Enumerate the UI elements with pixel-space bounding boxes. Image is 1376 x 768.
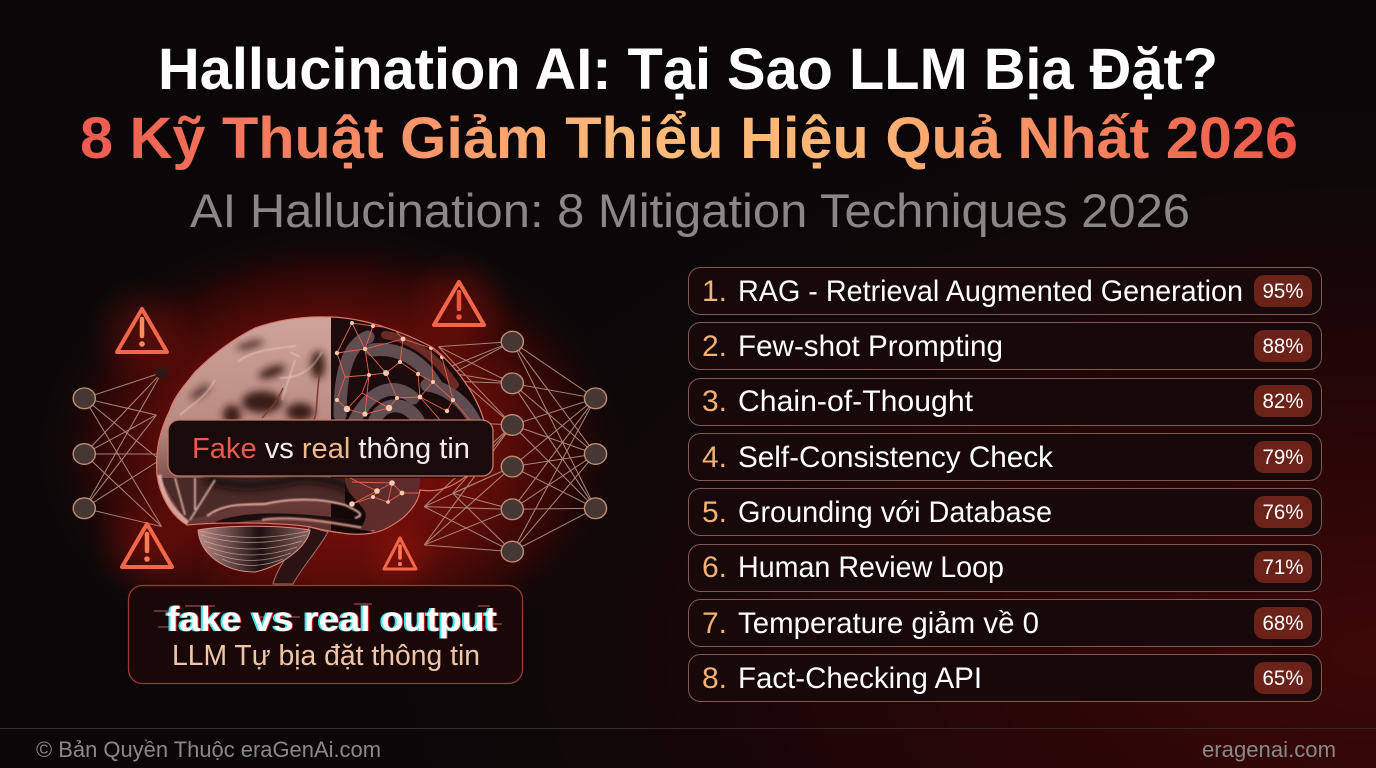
item 5: 5. [702, 496, 727, 529]
callout: fake vs real output: LLM Tự bịa đặt thông tin [172, 640, 480, 672]
item 7: 68% [1262, 612, 1304, 635]
callout: fake vs real output: fake vs real output [167, 600, 497, 639]
item 2: 88% [1262, 335, 1304, 358]
left hemisphere [157, 317, 420, 534]
item 4: Self-Consistency Check [738, 441, 1054, 474]
right hemisphere network [331, 321, 483, 507]
title [80, 37, 1298, 171]
brain hemispheres [157, 317, 483, 534]
neural network right [417, 331, 607, 562]
warning icon top right [404, 250, 514, 360]
warning icon bottom right [360, 515, 440, 595]
item 8: 65% [1262, 667, 1304, 690]
item 6: 71% [1262, 556, 1304, 579]
illustration: brain and network [64, 247, 608, 594]
item 3: Chain-of-Thought [738, 385, 974, 418]
label: fake vs real [168, 420, 493, 476]
item 6: 6. [702, 551, 727, 584]
neural network left [73, 367, 168, 527]
item 5 [688, 488, 1322, 536]
item 2 [688, 322, 1322, 370]
label: fake vs real: Fake vs real thông tin [192, 433, 470, 465]
title line 2: 8 Kỹ Thuật Giảm Thiểu Hiệu Quả Nhất 2026 [80, 106, 1298, 171]
item 4: 4. [702, 441, 727, 474]
item 3 [688, 378, 1322, 426]
item 6 [688, 544, 1322, 592]
brain outline [157, 317, 485, 534]
warning icon bottom left [92, 492, 202, 602]
item 1 [688, 268, 1322, 314]
item 4 [688, 434, 1322, 480]
lower left hemisphere [158, 475, 375, 530]
site url: eragenai.com [1202, 737, 1336, 762]
item 5: Grounding với Database [738, 496, 1052, 529]
title line 1: Hallucination AI: Tại Sao LLM Bịa Đặt? [158, 37, 1218, 102]
item 7: Temperature giảm về 0 [738, 607, 1039, 640]
brain [150, 310, 495, 584]
brain stem [273, 527, 328, 584]
footer [0, 728, 1376, 762]
callout: fake vs real output [128, 586, 522, 684]
item 5: 76% [1262, 501, 1304, 524]
temporal lobe [345, 478, 420, 530]
item 1: RAG - Retrieval Augmented Generation [738, 275, 1243, 308]
ranked techniques list [688, 268, 1322, 702]
item 3: 3. [702, 385, 727, 418]
item 1: 95% [1262, 280, 1304, 303]
glitch streaks [154, 604, 502, 627]
warning icons [87, 250, 514, 602]
item 8: 8. [702, 662, 727, 695]
copyright: © Bản Quyền Thuộc eraGenAi.com [36, 737, 381, 762]
item 6: Human Review Loop [738, 551, 1004, 584]
item 2: 2. [702, 330, 727, 363]
item 3: 82% [1262, 390, 1304, 413]
item 8 [688, 654, 1322, 702]
cerebellum [198, 526, 310, 572]
item 4: 79% [1262, 446, 1304, 469]
item 8: Fact-Checking API [738, 662, 982, 695]
item 7: 7. [702, 607, 727, 640]
warning icon top left [87, 277, 197, 387]
item 2: Few-shot Prompting [738, 330, 1003, 363]
item 7 [688, 600, 1322, 646]
subtitle: AI Hallucination: 8 Mitigation Techniques 2026 [190, 184, 1190, 237]
item 1: 1. [702, 275, 727, 308]
